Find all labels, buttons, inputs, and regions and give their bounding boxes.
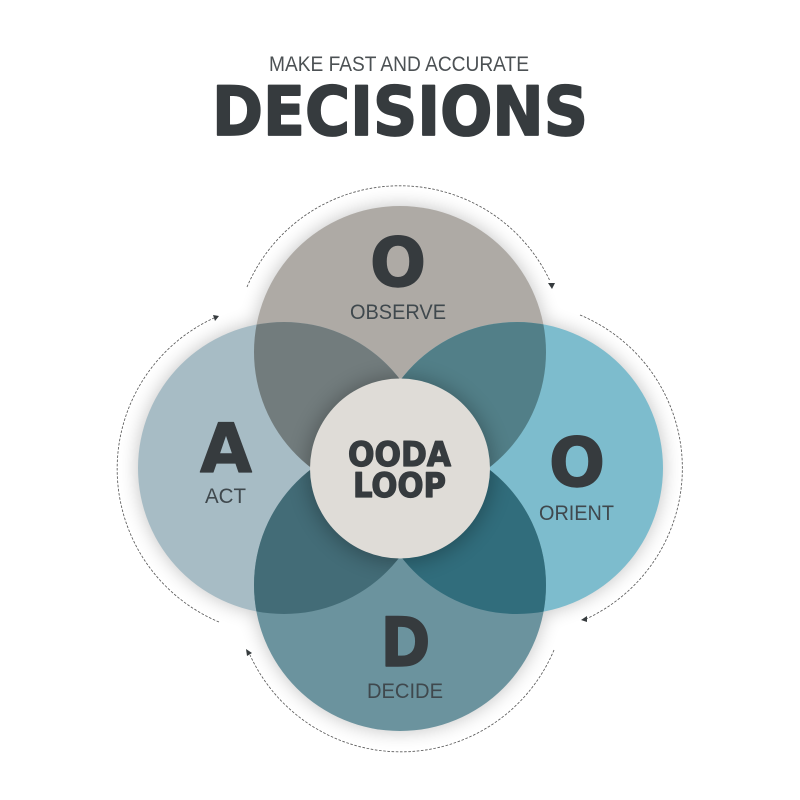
panel: decide circle xyxy=(254,439,546,731)
decide text xyxy=(367,604,443,703)
center label xyxy=(348,435,452,506)
decide text: D xyxy=(380,604,430,683)
center circle xyxy=(310,378,490,558)
arrow: orient to decide xyxy=(580,315,682,622)
act text: A xyxy=(200,410,252,489)
observe text: O xyxy=(370,224,426,303)
panel: observe circle xyxy=(254,206,546,498)
panel: orient circle xyxy=(371,322,663,614)
overlap: observe and orient xyxy=(402,322,546,467)
center label: LOOP xyxy=(353,466,446,506)
act text: ACT xyxy=(205,485,246,508)
title: DECISIONS xyxy=(212,73,588,152)
orient text: O xyxy=(549,424,605,503)
arrow: observe to orient xyxy=(247,186,555,289)
orient text: ORIENT xyxy=(539,502,614,525)
panel: act circle xyxy=(138,322,430,614)
subtitle: MAKE FAST AND ACCURATE xyxy=(269,53,529,76)
arrow: act to observe xyxy=(117,315,219,622)
overlap: decide and orient xyxy=(402,470,546,614)
center label: OODA xyxy=(348,435,452,475)
observe text: OBSERVE xyxy=(350,301,446,324)
circle shadows xyxy=(137,205,664,732)
observe text xyxy=(350,224,446,324)
overlap: decide and act xyxy=(254,470,398,614)
orient text xyxy=(539,424,614,525)
arrow: decide to act xyxy=(246,649,554,752)
decide text: DECIDE xyxy=(367,680,443,703)
overlap: observe and act xyxy=(254,322,400,467)
